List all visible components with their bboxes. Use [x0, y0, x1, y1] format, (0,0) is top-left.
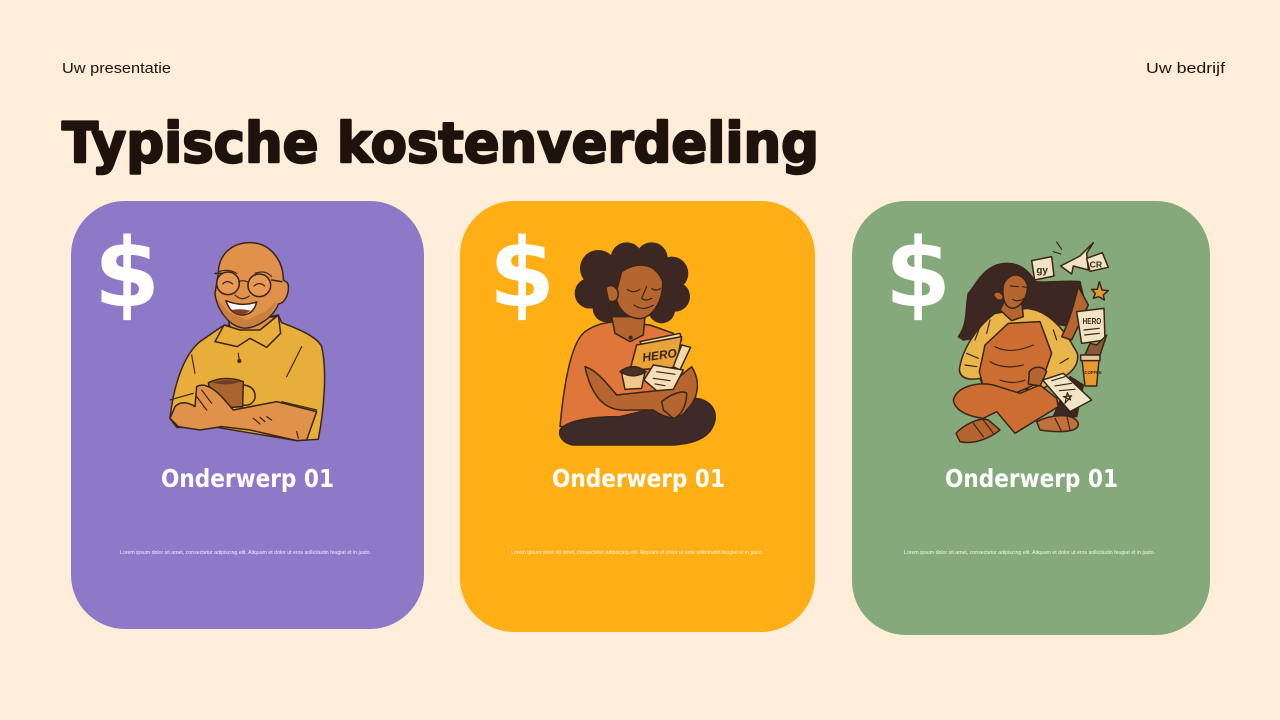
icon: dollar sign purple card: $ — [94, 219, 160, 329]
icon: dollar sign orange card: $ — [489, 219, 555, 329]
icon: dollar sign green card: $ — [885, 219, 951, 329]
body text purple card: Lorem ipsum dolor sit amet, consectetur adipiscing elit. Aliquam et dolor ut eros sollicitudin feugiat et in justo. — [120, 550, 371, 556]
illustration: seated woman with book and coffee: COFFEE — [1084, 370, 1102, 375]
title: Typische kostenverdeling — [62, 111, 819, 175]
heading purple card: Onderwerp 01 — [161, 464, 334, 493]
header right: company label: Uw bedrijf — [1146, 60, 1226, 77]
illustration: woman hugging book and coffee: HERO — [641, 346, 678, 365]
panel: purple card — [71, 201, 424, 629]
card background green — [852, 201, 1210, 635]
illustration: woman hugging book and coffee — [560, 242, 715, 445]
heading orange card: Onderwerp 01 — [552, 464, 725, 493]
body text green card: Lorem ipsum dolor sit amet, consectetur adipiscing elit. Aliquam et dolor ut eros sollicitudin feugiat et in justo. — [904, 550, 1155, 556]
illustration: seated woman with book and coffee: gy — [1036, 265, 1048, 276]
header left: presentation label: Uw presentatie — [62, 60, 171, 77]
body text orange card: Lorem ipsum dolor sit amet, consectetur adipiscing elit. Aliquam et dolor ut eros sollicitudin feugiat et in justo. — [511, 550, 763, 556]
card background orange — [460, 201, 815, 632]
illustration: seated woman with book and coffee — [953, 242, 1108, 443]
illustration: seated woman with book and coffee: HERO — [1083, 316, 1102, 326]
card background purple — [71, 201, 424, 629]
panel: green card — [852, 201, 1210, 635]
illustration: laughing man with coffee mug — [170, 243, 325, 441]
heading green card: Onderwerp 01 — [945, 464, 1118, 493]
illustration: seated woman with book and coffee: CR — [1090, 259, 1103, 269]
panel: orange card — [460, 201, 815, 632]
